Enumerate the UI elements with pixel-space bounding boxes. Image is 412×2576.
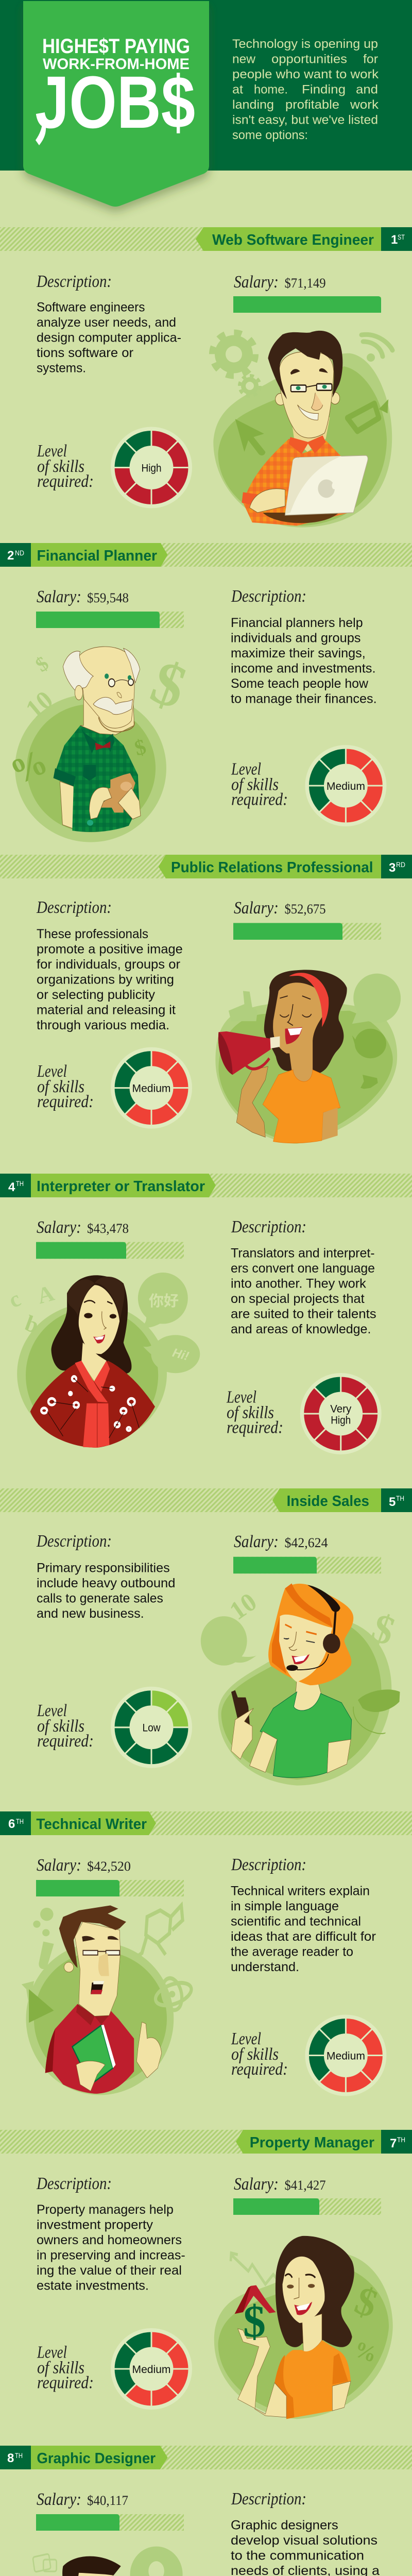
skill level label: Level — [231, 759, 261, 779]
icon: camera — [347, 399, 388, 431]
skill level label: required: — [231, 2060, 288, 2079]
backdrop blob — [214, 2253, 393, 2419]
kimono flowers — [41, 1377, 135, 1431]
description text: in simple language — [231, 1899, 339, 1913]
title text: HIGHE$T PAYING — [42, 35, 190, 58]
icons: dollar symbols and percent: % — [351, 2336, 381, 2367]
description heading: Description: — [231, 2489, 306, 2509]
icons: dollar symbols and percent — [243, 2277, 384, 2367]
icons: lab equipment — [22, 1908, 54, 2006]
icons: letters and greetings — [5, 1280, 191, 1363]
heading bar: TH — [16, 1179, 24, 1188]
icons: money symbols: $ — [143, 647, 195, 722]
skill gauge: Medium — [106, 1042, 197, 1133]
description text: calls to generate sales — [37, 1591, 163, 1606]
laptop — [285, 455, 368, 515]
description text — [37, 2202, 185, 2293]
skill gauge: Medium: Medium — [132, 1083, 171, 1095]
skill gauge: Medium: Medium — [327, 781, 365, 792]
heading bar — [0, 227, 412, 251]
description text: in preserving and increas- — [37, 2248, 185, 2263]
description text — [37, 1561, 175, 1621]
intro text: profitable — [285, 98, 339, 112]
heading bar: 3 — [389, 861, 396, 875]
description text: tions software or — [37, 346, 133, 360]
heading bar: 2 — [7, 549, 14, 563]
description text: or selecting publicity — [37, 988, 155, 1002]
heading bar: TH — [397, 2136, 405, 2144]
header band — [0, 0, 412, 171]
character — [51, 1275, 131, 1374]
skill gauge: High — [106, 422, 197, 513]
skill level label: required: — [37, 2373, 94, 2393]
icon: layers — [33, 2554, 57, 2572]
intro text — [232, 37, 379, 142]
icon: cursor — [235, 419, 265, 455]
description text: analyze user needs, and — [37, 315, 176, 330]
salary: Salary: — [37, 1218, 81, 1237]
skill level label — [37, 1701, 94, 1751]
illustration: interpreter — [17, 1273, 200, 1448]
heading bar: Web Software Engineer — [212, 232, 374, 248]
icons: letters and greetings: 你好 — [149, 1293, 179, 1310]
desk and hand — [263, 513, 339, 523]
title banner — [23, 1, 209, 207]
salary — [36, 2490, 184, 2531]
salary: $41,427 — [284, 2178, 325, 2193]
character — [64, 1962, 74, 1972]
description heading: Description: — [231, 587, 306, 606]
panel: 7 Property Manager — [0, 2130, 412, 2419]
backdrop blob — [26, 1942, 174, 2095]
character head — [243, 331, 350, 526]
description text: investment property — [37, 2217, 153, 2232]
description text — [231, 1884, 376, 1974]
description text: Property managers help — [37, 2202, 174, 2217]
icons: ten and dollar: $ — [366, 1605, 401, 1655]
panel: 6 Technical Writer — [0, 1811, 412, 2101]
salary — [233, 899, 381, 940]
backdrop blob — [218, 1622, 391, 1786]
description heading: Description: — [231, 1217, 306, 1236]
skill gauge: Medium — [300, 740, 391, 831]
heading bar: TH — [16, 1817, 24, 1825]
intro text: at — [232, 82, 243, 97]
skill level label: of skills — [37, 2359, 84, 2377]
salary — [36, 587, 184, 628]
megaphone — [218, 1031, 280, 1075]
icons: speech bubbles and hands — [229, 974, 401, 1024]
skill level label — [226, 1388, 283, 1437]
backdrop blob — [215, 1002, 397, 1144]
heading bar: 8 — [7, 2451, 14, 2465]
heading bar — [0, 1811, 412, 1835]
description text — [231, 1246, 376, 1336]
icon: house with dollar — [235, 2285, 276, 2314]
panel: 1 Web Software Engineer — [0, 227, 412, 528]
icons: dollar symbols and percent: $ — [349, 2277, 384, 2326]
heading bar: Interpreter or Translator — [37, 1178, 205, 1195]
skill level label — [37, 1062, 94, 1111]
description heading: Description: — [36, 1532, 112, 1551]
description text: for individuals, groups or — [37, 957, 180, 972]
salary — [36, 1856, 184, 1896]
skill level label: required: — [227, 1418, 283, 1437]
intro text: home. — [254, 82, 288, 97]
panel: 8 Graphic Designer — [0, 2446, 412, 2576]
description text: ideas that are difficult for — [231, 1929, 376, 1944]
skill level label: of skills — [37, 457, 84, 476]
description text: Technical writers explain — [231, 1884, 370, 1899]
icons: ten and dollar: 10 — [224, 1587, 262, 1625]
title text — [35, 35, 195, 145]
salary — [233, 2175, 381, 2215]
description text: income and investments. — [231, 662, 376, 676]
panel: 5 Inside Sales — [0, 1488, 412, 1786]
speech bubble — [201, 1616, 256, 1666]
description text: are suited to their talents — [231, 1307, 376, 1321]
skill level label: Level — [37, 442, 67, 461]
heading bar — [0, 1488, 412, 1512]
skill level label: required: — [37, 472, 94, 491]
salary: Salary: — [234, 899, 279, 918]
description text: and areas of knowledge. — [231, 1322, 371, 1336]
salary: Salary: — [234, 2175, 279, 2194]
description text: to manage their finances. — [231, 691, 377, 706]
description text: Translators and interpret- — [231, 1246, 375, 1261]
description heading: Description: — [36, 898, 112, 917]
skill level label: of skills — [37, 1077, 84, 1096]
panel: 2 Financial Planner — [0, 543, 412, 842]
intro text: work — [350, 98, 379, 112]
salary — [233, 1532, 381, 1573]
heading bar — [0, 543, 412, 567]
skill gauge: Low: Low — [142, 1722, 161, 1734]
skill gauge: Very High: Very — [330, 1403, 352, 1415]
description text: understand. — [231, 1960, 299, 1974]
heading bar: RD — [396, 860, 405, 869]
intro text: some options: — [232, 128, 308, 142]
heading bar — [0, 1174, 412, 1197]
salary: $42,520 — [87, 1859, 131, 1874]
description heading: Description: — [231, 1855, 306, 1874]
skill level label: of skills — [231, 775, 279, 794]
description text: on special projects that — [231, 1292, 365, 1306]
description text: the average reader to — [231, 1945, 353, 1959]
skill gauge: High: High — [141, 463, 162, 474]
illustration: technical writer — [22, 1905, 193, 2095]
skill level label — [231, 759, 288, 809]
skill level label: Level — [37, 2343, 67, 2362]
salary: $42,624 — [284, 1535, 328, 1550]
icons: dollar symbols and percent: $ — [243, 2297, 266, 2347]
icons: ten and dollar — [224, 1587, 401, 1655]
description text: ers convert one language — [231, 1261, 375, 1276]
icon: gears — [212, 333, 260, 396]
illustration: public relations professional — [215, 970, 401, 1144]
description text: Financial planners help — [231, 616, 363, 630]
icons: money symbols: $ — [31, 651, 53, 676]
skill gauge: Medium: Medium — [327, 2050, 365, 2062]
description text: Primary responsibilities — [37, 1561, 170, 1575]
skill gauge: Medium — [300, 2010, 391, 2101]
skill level label: of skills — [231, 2045, 279, 2064]
skill level label: of skills — [227, 1403, 274, 1422]
panel: 3 Public Relations Professional — [0, 855, 412, 1144]
icons: money symbols — [4, 647, 195, 793]
icons: money symbols: $ — [132, 735, 149, 760]
icons: money symbols: % — [4, 741, 54, 793]
salary: Salary: — [234, 1532, 279, 1551]
heading bar — [0, 2446, 412, 2469]
heading bar: Inside Sales — [287, 1493, 369, 1510]
skill level label: of skills — [37, 1717, 84, 1736]
skill gauge: Medium — [106, 2324, 197, 2414]
salary: $43,478 — [87, 1221, 129, 1236]
skill level label — [37, 2343, 94, 2393]
skill level label: required: — [37, 1732, 94, 1751]
description text — [37, 300, 181, 375]
icons: money symbols: 10 — [20, 685, 58, 724]
skill level label — [231, 2029, 288, 2079]
intro text: Technology is opening up — [232, 37, 378, 51]
skill gauge: Medium: Medium — [132, 2364, 171, 2376]
backdrop blob — [15, 694, 166, 842]
icon: light bulb bubble — [130, 2547, 183, 2576]
intro text: isn't easy, but we've listed — [232, 113, 378, 127]
heading bar: 5 — [389, 1495, 396, 1509]
heading bar: Property Manager — [250, 2134, 374, 2151]
description text: owners and homeowners — [37, 2233, 182, 2247]
description text: systems. — [37, 361, 86, 375]
backdrop blob — [213, 353, 392, 528]
heading bar: 7 — [390, 2137, 397, 2150]
icon: wifi — [362, 334, 392, 362]
piggy bank in hands — [87, 773, 141, 826]
intro text: for — [363, 53, 378, 66]
salary: $52,675 — [284, 902, 325, 917]
description text — [37, 927, 183, 1032]
icon: telephone — [358, 1689, 400, 1712]
description text: and new business. — [37, 1606, 144, 1621]
heading bar — [0, 855, 412, 878]
intro text: new — [232, 53, 256, 66]
heading bar: Graphic Designer — [37, 2450, 156, 2467]
description text: These professionals — [37, 927, 148, 941]
description heading: Description: — [36, 272, 112, 291]
icons: letters and greetings: c — [5, 1286, 24, 1313]
description text — [231, 2518, 380, 2576]
icons: letters and greetings: Hi! — [171, 1346, 191, 1363]
salary: $59,548 — [87, 590, 129, 605]
skill level label: Level — [37, 1701, 67, 1720]
salary: Salary: — [37, 2490, 81, 2509]
description text: material and releasing it — [37, 1003, 176, 1017]
description text: Some teach people how — [231, 676, 369, 691]
icon: rising arrow — [231, 2253, 279, 2284]
title text: JOB$ — [35, 61, 195, 144]
title text: WORK-FROM-HOME — [43, 56, 190, 73]
description text: organizations by writing — [37, 972, 174, 987]
description text — [231, 616, 377, 706]
heading bar: TH — [15, 2451, 23, 2460]
heading bar: 6 — [8, 1817, 15, 1831]
salary: Salary: — [37, 587, 81, 606]
description text: ing the value of their real — [37, 2263, 182, 2278]
skill level label: Level — [231, 2029, 261, 2048]
headset — [286, 1585, 340, 1671]
salary: $40,117 — [87, 2493, 128, 2508]
icons: letters and greetings: b — [22, 1310, 42, 1338]
skill gauge: Very High — [296, 1368, 386, 1459]
heading bar: ST — [398, 233, 405, 241]
description text: scientific and technical — [231, 1914, 361, 1929]
book and hands — [72, 2025, 115, 2091]
heading bar: ND — [15, 549, 24, 557]
backdrop blob — [17, 1303, 167, 1445]
description text: Software engineers — [37, 300, 145, 314]
salary: Salary: — [234, 273, 279, 292]
description text: to the communication — [231, 2548, 364, 2563]
skill level label — [37, 442, 94, 491]
character — [264, 970, 347, 1075]
icons: letters and greetings: A — [35, 1280, 57, 1309]
description text: Graphic designers — [231, 2518, 338, 2533]
illustration: inside sales — [201, 1583, 400, 1786]
illustration: property manager — [214, 2236, 393, 2419]
skill level label: required: — [37, 1092, 94, 1111]
heading bar: 4 — [8, 1180, 15, 1194]
salary: Salary: — [37, 1856, 81, 1875]
description text: individuals and groups — [231, 631, 360, 645]
panel: 4 Interpreter or Translator — [0, 1174, 412, 1459]
character — [293, 1677, 321, 1710]
intro text: landing — [232, 98, 274, 112]
heading bar — [0, 2130, 412, 2154]
skill gauge: Very High: High — [331, 1415, 351, 1426]
illustration: financial planner — [15, 647, 166, 842]
description text: estate investments. — [37, 2278, 149, 2293]
hand holding phone — [231, 1690, 253, 1759]
heading bar: Technical Writer — [36, 1816, 147, 1833]
description heading: Description: — [36, 2174, 112, 2193]
character body — [54, 647, 140, 832]
salary — [233, 273, 381, 313]
illustration: software engineer — [213, 331, 392, 528]
illustration: graphic designer — [25, 2547, 183, 2576]
intro text: opportunities — [271, 53, 347, 66]
description text: through various media. — [37, 1018, 169, 1032]
intro text: Finding — [302, 82, 346, 97]
skill gauge: Low — [106, 1682, 197, 1773]
heading bar: TH — [396, 1494, 404, 1502]
heading bar: Financial Planner — [37, 548, 157, 564]
skill level label: required: — [231, 790, 288, 809]
intro text: people who want to work — [232, 67, 379, 81]
description text: into another. They work — [231, 1277, 366, 1291]
description text: promote a positive image — [37, 942, 183, 956]
speech bubbles — [138, 1273, 200, 1373]
description text: maximize their savings, — [231, 646, 366, 660]
description text: design computer applica- — [37, 331, 181, 345]
salary: $71,149 — [284, 276, 325, 291]
description text: develop visual solutions — [231, 2533, 377, 2548]
heading bar: 1 — [391, 233, 398, 247]
description text: include heavy outbound — [37, 1576, 175, 1590]
heading bar: Public Relations Professional — [171, 859, 373, 876]
salary — [36, 1218, 184, 1259]
character — [276, 2236, 354, 2347]
skill level label: Level — [226, 1388, 256, 1406]
intro text: and — [356, 82, 378, 97]
skill level label: Level — [37, 1062, 67, 1081]
